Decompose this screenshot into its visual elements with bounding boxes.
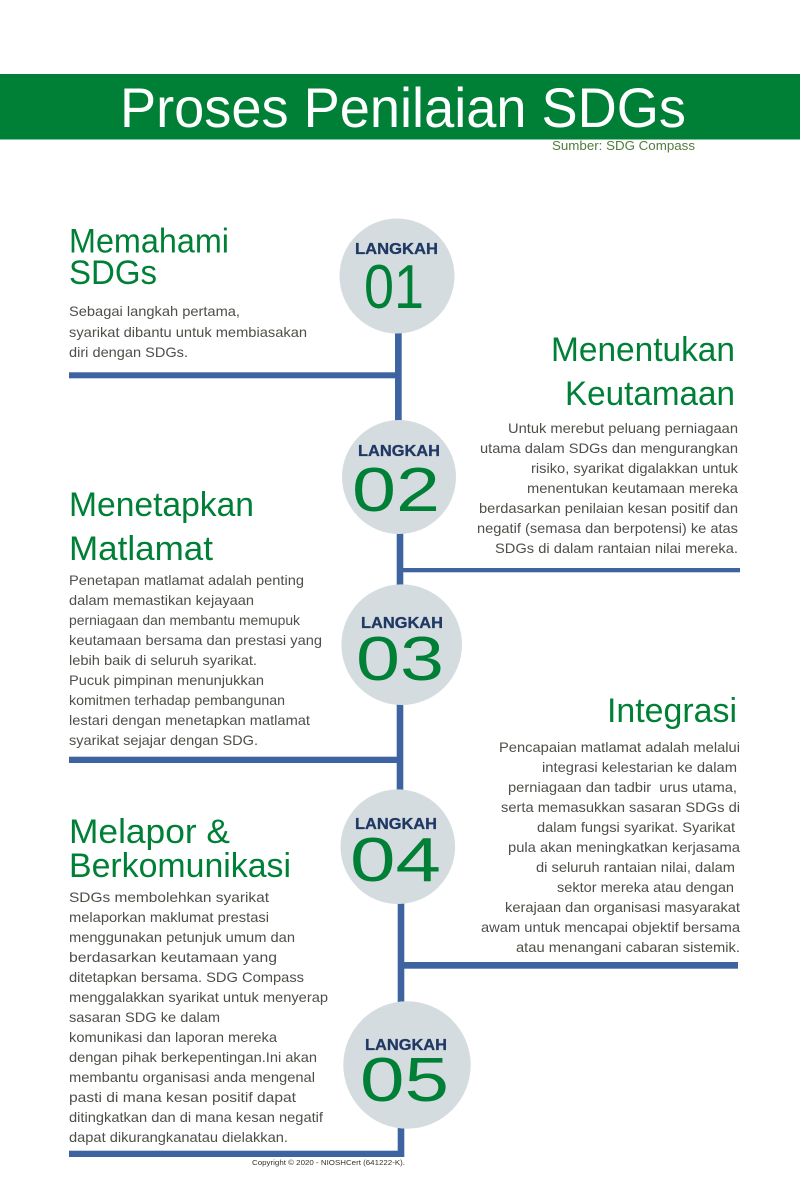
step 2 text — [477, 420, 739, 556]
panel: step 3 — [69, 486, 462, 748]
step 5 badge: 05 — [360, 1046, 449, 1115]
step 1 text — [69, 303, 307, 360]
panel: step 5 — [69, 813, 471, 1145]
copyright footer: Copyright © 2020 - NIOSHCert (641222-K). — [252, 1158, 405, 1167]
step 3 heading: Matlamat — [69, 530, 214, 568]
step 2 badge: 02 — [352, 456, 440, 525]
timeline connectors — [69, 330, 740, 1157]
step 5 text: sasaran SDG ke dalam — [69, 1009, 220, 1025]
panel: step 2 — [342, 331, 739, 556]
step 4 text: pula akan meningkatkan kerjasama — [508, 839, 740, 855]
step 2 badge — [342, 420, 456, 534]
step 4 text: di seluruh rantaian nilai, dalam — [536, 859, 735, 875]
step 2 text: Untuk merebut peluang perniagaan — [508, 420, 738, 436]
step 3 text: perniagaan dan membantu memupuk — [69, 612, 301, 628]
step 1 badge: 01 — [364, 253, 424, 322]
step 5 text: dapat dikurangkanatau dielakkan. — [69, 1129, 288, 1145]
step 3 text: Penetapan matlamat adalah penting — [69, 572, 304, 588]
step 2 text: menentukan keutamaan mereka — [527, 480, 738, 496]
step 3 badge — [341, 584, 462, 705]
step 2 badge: LANGKAH — [358, 443, 440, 460]
step 5 text — [69, 889, 328, 1145]
step 5 text: ditetapkan bersama. SDG Compass — [69, 969, 304, 985]
step 4 text: sektor mereka atau dengan — [557, 879, 734, 895]
step 3 text: dalam memastikan kejayaan — [69, 592, 254, 608]
step 5 heading: Berkomunikasi — [69, 847, 291, 885]
source note: Sumber: SDG Compass — [552, 139, 695, 153]
step 2 text: negatif (semasa dan berpotensi) ke atas — [477, 520, 738, 536]
step 3 badge: LANGKAH — [361, 615, 443, 632]
step 4 text: kerajaan dan organisasi masyarakat — [505, 899, 740, 915]
step 5 text: membantu organisasi anda mengenal — [69, 1069, 315, 1085]
step 3 text: lebih baik di seluruh syarikat. — [69, 652, 257, 668]
step 1 badge — [340, 218, 454, 334]
step 4 text: integrasi kelestarian ke dalam — [542, 759, 737, 775]
step 5 text: ditingkatkan dan di mana kesan negatif — [69, 1109, 323, 1125]
step 2 heading: Keutamaan — [565, 375, 735, 413]
step 4 text: serta memasukkan sasaran SDGs di — [501, 799, 740, 815]
step 5 text: pasti di mana kesan positif dapat — [69, 1089, 296, 1105]
step 4 text: Pencapaian matlamat adalah melalui — [499, 739, 740, 755]
step 3 heading — [69, 486, 254, 568]
step 1 text: Sebagai langkah pertama, — [69, 303, 240, 319]
step 3 text: keutamaan bersama dan prestasi yang — [69, 632, 322, 648]
step 4 text: perniagaan dan tadbir urus utama, — [508, 779, 737, 795]
step 4 text: awam untuk mencapai objektif bersama — [481, 919, 740, 935]
step 3 text — [69, 572, 322, 748]
step 1 text: diri dengan SDGs. — [69, 344, 188, 360]
panel: step 4 — [340, 692, 740, 955]
step 3 text: lestari dengan menetapkan matlamat — [69, 712, 310, 728]
step 5 heading: Melapor & — [69, 813, 230, 851]
step 5 text: menggalakkan syarikat untuk menyerap — [69, 989, 328, 1005]
step 5 text: dengan pihak berkepentingan.Ini akan — [69, 1049, 317, 1065]
step 5 text: berdasarkan keutamaan yang — [69, 949, 277, 965]
title banner: Proses Penilaian SDGs — [120, 76, 686, 139]
step 3 text: syarikat sejajar dengan SDG. — [69, 732, 258, 748]
step 2 text: berdasarkan penilaian kesan positif dan — [479, 500, 738, 516]
step 1 heading: Memahami — [69, 223, 229, 261]
step 2 text: utama dalam SDGs dan mengurangkan — [480, 440, 738, 456]
step 1 heading: SDGs — [69, 254, 157, 292]
step 5 text: melaporkan maklumat prestasi — [69, 909, 269, 925]
step 2 heading — [551, 331, 735, 413]
step 5 heading — [69, 813, 291, 885]
step 2 heading: Menentukan — [551, 331, 735, 369]
step 1 text: syarikat dibantu untuk membiasakan — [69, 324, 307, 340]
step 4 heading: Integrasi — [607, 692, 737, 730]
step 4 badge: 04 — [350, 826, 441, 895]
step 5 badge — [343, 1001, 471, 1129]
step 5 text: SDGs membolehkan syarikat — [69, 889, 269, 905]
step 4 text: dalam fungsi syarikat. Syarikat — [537, 819, 735, 835]
step 1 badge: LANGKAH — [355, 241, 438, 258]
step 3 text: Pucuk pimpinan menunjukkan — [69, 672, 264, 688]
step 3 text: komitmen terhadap pembangunan — [69, 692, 285, 708]
step 3 heading: Menetapkan — [69, 486, 254, 524]
step 3 badge: 03 — [356, 625, 444, 694]
step 4 text: atau menangani cabaran sistemik. — [516, 939, 740, 955]
panel: step 1 — [69, 218, 454, 360]
step 2 text: risiko, syarikat digalakkan untuk — [531, 460, 739, 476]
step 5 badge: LANGKAH — [365, 1037, 447, 1054]
step 5 text: komunikasi dan laporan mereka — [69, 1029, 277, 1045]
step 4 badge — [340, 789, 455, 904]
step 5 text: menggunakan petunjuk umum dan — [69, 929, 295, 945]
step 4 text — [481, 739, 740, 955]
step 1 heading — [69, 223, 229, 292]
step 2 text: SDGs di dalam rantaian nilai mereka. — [495, 540, 738, 556]
step 4 badge: LANGKAH — [355, 816, 437, 833]
